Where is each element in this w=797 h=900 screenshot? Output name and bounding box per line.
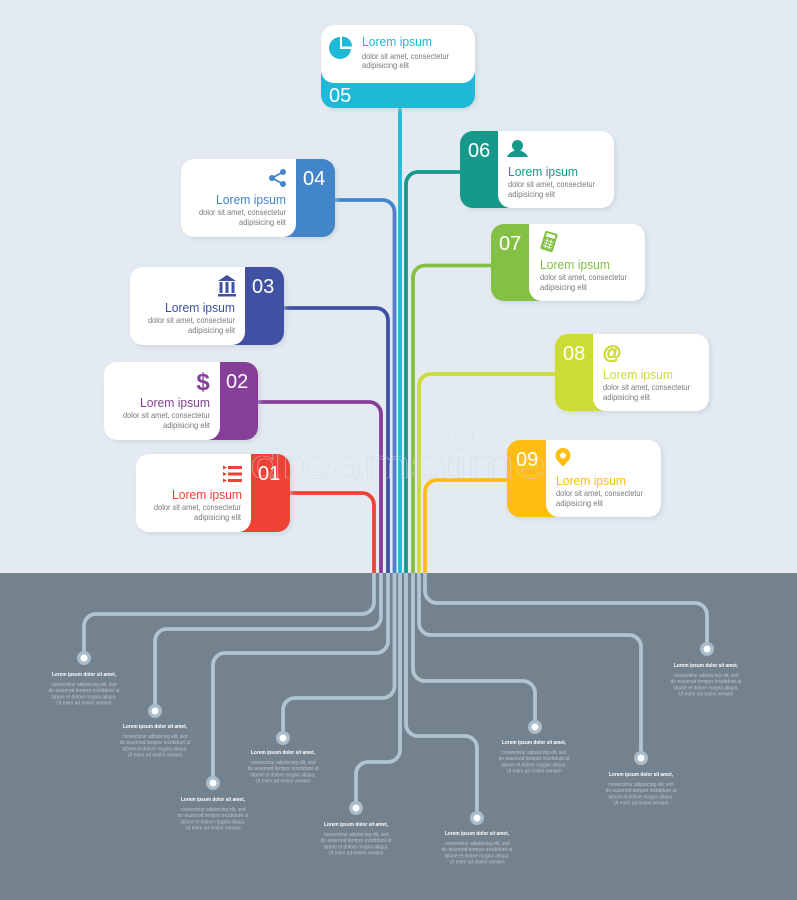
card 09: 09: [516, 449, 538, 471]
node and text 7: Ut enim ad minim veniam: [506, 768, 562, 774]
node and text 9: Ut enim ad minim veniam: [678, 692, 734, 698]
node and text 4: Lorem ipsum dolor sit amet,: [251, 750, 316, 756]
card 02: 02: [226, 371, 248, 393]
root lines below ground: [84, 573, 707, 818]
icon: pie chart: [329, 36, 352, 59]
card 02: Lorem ipsum: [140, 395, 210, 410]
node and text 2: consectetur adipisicing elit, sed: [122, 734, 188, 740]
icon: share: [270, 170, 286, 186]
node and text 7: consectetur adipisicing elit, sed: [502, 750, 567, 756]
watermark: dreamstime: [250, 441, 546, 487]
watermark: [250, 423, 546, 487]
node and text 5: [320, 801, 392, 856]
card 07: 07: [499, 233, 521, 255]
card 08: [555, 334, 711, 413]
node and text 7: labore et dolore magna aliqua.: [502, 762, 566, 768]
node and text 2: do eiusmod tempor incididunt ut: [120, 740, 191, 746]
card 08: Lorem ipsum: [603, 367, 673, 382]
card 06: dolor sit amet, consectetur: [508, 179, 595, 189]
icon: person: [507, 140, 528, 157]
icon: calculator: [540, 231, 558, 252]
card 07: [491, 224, 647, 303]
card 04: Lorem ipsum: [216, 192, 286, 207]
card 06: Lorem ipsum: [508, 164, 578, 179]
icon: at sign: @: [603, 343, 621, 364]
node and text 8: labore et dolore magna aliqua.: [608, 794, 674, 800]
icon: map pin: [556, 448, 570, 466]
card 05: 05: [329, 85, 351, 107]
node and text 2: Ut enim ad minim veniam: [128, 752, 182, 758]
node and text 8: do eiusmod tempor incididunt ut: [606, 788, 677, 794]
node and text 4: Ut enim ad minim veniam: [256, 778, 310, 784]
card 06: adipisicing elit: [508, 189, 556, 199]
node and text 6: labore et dolore magna aliqua.: [444, 854, 510, 860]
icon: bank: [218, 275, 236, 296]
node and text 2: labore et dolore magna aliqua.: [122, 746, 188, 752]
node and text 6: Lorem ipsum dolor sit amet,: [445, 831, 510, 837]
node and text 3: Ut enim ad minim veniam: [186, 826, 240, 832]
node and text 1: consectetur adipisicing elit, sed: [52, 682, 117, 688]
background: upper sky area: [0, 0, 797, 573]
card 05: dolor sit amet, consectetur: [362, 51, 449, 61]
node and text 3: [178, 776, 249, 832]
node and text 7: [498, 720, 570, 774]
node and text 9: [670, 642, 742, 698]
coloured connector lines above ground: [258, 108, 555, 573]
card 09: dolor sit amet, consectetur: [556, 488, 643, 498]
background: lower ground area: [0, 573, 797, 900]
node and text 5: labore et dolore magna aliqua.: [324, 844, 388, 850]
card 09: Lorem ipsum: [556, 473, 626, 488]
node and text 3: labore et dolore magna aliqua.: [180, 820, 246, 826]
node and text 7: do eiusmod tempor incididunt ut: [498, 756, 570, 762]
node and text 1: Lorem ipsum dolor sit amet,: [52, 672, 117, 678]
node and text 4: [248, 731, 319, 784]
card 05: adipisicing elit: [362, 60, 410, 70]
node and text 7: Lorem ipsum dolor sit amet,: [502, 740, 567, 746]
card 07: adipisicing elit: [540, 282, 588, 292]
card 02: [104, 362, 260, 442]
node and text 3: Lorem ipsum dolor sit amet,: [181, 797, 246, 803]
node and text 4: do eiusmod tempor incididunt ut: [248, 766, 319, 772]
card 07: Lorem ipsum: [540, 257, 610, 272]
node and text 1: [48, 651, 120, 706]
card 08: adipisicing elit: [603, 392, 651, 402]
card 01: [136, 454, 292, 534]
node and text 8: consectetur adipisicing elit, sed: [608, 782, 674, 788]
card 01: Lorem ipsum: [172, 487, 242, 502]
node and text 6: consectetur adipisicing elit, sed: [444, 841, 510, 847]
card 02: adipisicing elit: [163, 420, 211, 430]
card 01: 01: [258, 463, 280, 485]
icon: list: [223, 466, 242, 482]
card 09: adipisicing elit: [556, 498, 604, 508]
card 01: dolor sit amet, consectetur: [154, 502, 241, 512]
node and text 4: consectetur adipisicing elit, sed: [250, 760, 316, 766]
card 03: [130, 267, 286, 347]
card 08: 08: [563, 343, 585, 365]
node and text 8: [606, 751, 677, 806]
node and text 5: Lorem ipsum dolor sit amet,: [324, 822, 389, 828]
node and text 1: do eiusmod tempor incididunt ut: [48, 688, 120, 694]
node and text 8: Ut enim ad minim veniam: [614, 800, 668, 806]
node and text 3: do eiusmod tempor incididunt ut: [178, 813, 249, 819]
card 04: adipisicing elit: [239, 217, 287, 227]
card 03: Lorem ipsum: [165, 300, 235, 315]
node and text 6: [442, 811, 513, 866]
card 05: Lorem ipsum: [362, 34, 432, 49]
node and text 2: [120, 704, 191, 758]
icon: dollar: $: [196, 369, 210, 396]
card 09: [507, 440, 663, 519]
card 04: [181, 159, 337, 239]
node and text 5: consectetur adipisicing elit, sed: [324, 832, 389, 838]
node and text 9: labore et dolore magna aliqua.: [674, 686, 738, 692]
node and text 5: Ut enim ad minim veniam: [328, 850, 384, 856]
card 02: dolor sit amet, consectetur: [123, 410, 210, 420]
card 03: dolor sit amet, consectetur: [148, 315, 235, 325]
card 01: adipisicing elit: [194, 512, 242, 522]
node and text 5: do eiusmod tempor incididunt ut: [320, 838, 392, 844]
node and text 1: labore et dolore magna aliqua.: [52, 694, 116, 700]
card 05: [321, 25, 477, 110]
node and text 3: consectetur adipisicing elit, sed: [180, 807, 246, 813]
card 08: dolor sit amet, consectetur: [603, 382, 690, 392]
node and text 2: Lorem ipsum dolor sit amet,: [123, 724, 188, 730]
card 03: 03: [252, 276, 274, 298]
card 07: dolor sit amet, consectetur: [540, 272, 627, 282]
card 04: 04: [303, 168, 325, 190]
node and text 6: do eiusmod tempor incididunt ut: [442, 847, 513, 853]
node and text 6: Ut enim ad minim veniam: [450, 860, 504, 866]
card 04: dolor sit amet, consectetur: [199, 207, 286, 217]
node and text 1: Ut enim ad minim veniam: [56, 700, 112, 706]
node and text 9: consectetur adipisicing elit, sed: [674, 673, 739, 679]
card 03: adipisicing elit: [188, 325, 236, 335]
card 06: [460, 131, 616, 210]
node and text 9: do eiusmod tempor incididunt ut: [670, 679, 742, 685]
node and text 9: Lorem ipsum dolor sit amet,: [674, 663, 739, 669]
node and text 4: labore et dolore magna aliqua.: [250, 772, 316, 778]
card 06: 06: [468, 140, 490, 162]
node and text 8: Lorem ipsum dolor sit amet,: [609, 772, 674, 778]
